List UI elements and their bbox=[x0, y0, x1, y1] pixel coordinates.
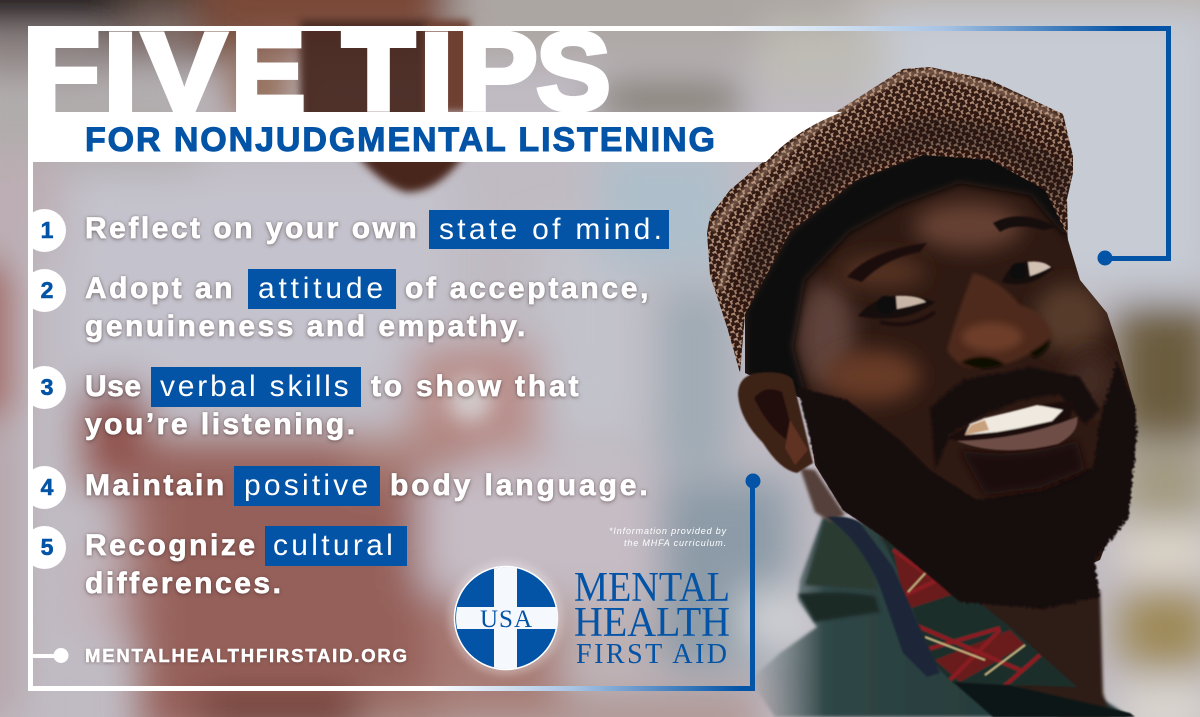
tip 4 bbox=[33, 466, 651, 509]
number badge 2 bbox=[33, 269, 66, 312]
title: FIVE TIPS: P bbox=[458, 11, 538, 133]
tip 5 first line: Recognize bbox=[85, 529, 258, 562]
number badge 3: 3 bbox=[41, 374, 53, 400]
highlight: cultural: cultural bbox=[273, 529, 396, 562]
tip 2 bbox=[33, 269, 651, 346]
frame bottom and right arm with dot bbox=[28, 474, 760, 691]
logo wordmark bbox=[574, 565, 730, 670]
tip 2 first line start: Adopt an bbox=[85, 272, 235, 305]
footnote: the MHFA curriculum. bbox=[624, 538, 727, 548]
logo emblem bbox=[449, 560, 566, 676]
title: FIVE TIPS bbox=[33, 31, 609, 112]
number badge 1: 1 bbox=[41, 217, 53, 243]
tip 2 second line: genuineness and empathy. bbox=[85, 310, 528, 343]
man: face with hair bbox=[745, 155, 1135, 562]
title: FIVE TIPS: V bbox=[142, 11, 226, 134]
number badge 2: 2 bbox=[41, 277, 53, 303]
tip 1 bbox=[33, 209, 669, 252]
tip 2 first line end: of acceptance, bbox=[405, 272, 651, 305]
man: chin shadow bbox=[960, 440, 1085, 495]
frame left side bbox=[28, 26, 33, 691]
man: hat bbox=[700, 60, 1080, 380]
title: FIVE TIPS: F bbox=[28, 11, 100, 134]
title: FIVE TIPS: E bbox=[231, 11, 305, 133]
tip 3 bbox=[33, 366, 581, 444]
highlight: state of mind: state of mind. bbox=[439, 213, 665, 246]
tip 5 second line: differences. bbox=[85, 567, 283, 600]
number badge 5: 5 bbox=[41, 534, 53, 560]
tip 3 first line start: Use bbox=[85, 370, 142, 403]
man: eyes and brows bbox=[847, 216, 1057, 324]
man: moustache and mouth bbox=[930, 367, 1100, 470]
title: FIVE TIPS: I bbox=[104, 10, 137, 133]
number badge 3 bbox=[33, 366, 66, 409]
title: FIVE TIPS: I bbox=[420, 10, 453, 133]
website: MENTALHEALTHFIRSTAID.ORG bbox=[85, 645, 409, 666]
man: plaid collar bbox=[883, 537, 1077, 690]
number badge 4: 4 bbox=[41, 474, 53, 500]
number badge 1 bbox=[33, 209, 66, 252]
logo wordmark: HEALTH bbox=[574, 600, 730, 646]
man: neck bbox=[800, 468, 1110, 717]
title: FIVE TIPS: T bbox=[342, 11, 415, 134]
tip 1 text: Reflect on your own bbox=[85, 212, 419, 245]
tip 3 first line end: to show that bbox=[371, 370, 581, 403]
highlight: verbal skills: verbal skills bbox=[160, 370, 351, 403]
number badge 5 bbox=[33, 526, 66, 569]
man: nose bbox=[947, 273, 1053, 369]
man: jacket lower collar bbox=[953, 682, 1135, 717]
highlight: positive: positive bbox=[244, 469, 371, 502]
highlight: attitude: attitude bbox=[258, 272, 387, 305]
man: beard bbox=[797, 360, 1137, 609]
website link connector bbox=[33, 648, 68, 663]
logo wordmark: MENTAL bbox=[574, 565, 730, 611]
title: FIVE TIPS: S bbox=[536, 11, 611, 133]
man: ear bbox=[738, 372, 813, 473]
number badge 4 bbox=[33, 466, 66, 509]
man: jacket strap bbox=[827, 517, 940, 677]
subtitle: FOR NONJUDGMENTAL LISTENING bbox=[85, 121, 715, 159]
tip 4 end: body language. bbox=[390, 469, 651, 502]
footnote: *Information provided by bbox=[609, 526, 727, 536]
frame top and right arm with dot bbox=[28, 26, 1171, 266]
logo emblem: USA bbox=[480, 606, 532, 633]
logo wordmark: FIRST AID bbox=[576, 639, 727, 670]
tip 5 bbox=[33, 526, 407, 600]
footnote bbox=[609, 526, 727, 548]
subtitle bar bbox=[33, 112, 842, 162]
tip 4 start: Maintain bbox=[85, 469, 227, 502]
man: jacket bbox=[750, 517, 1130, 717]
tip 3 second line: you’re listening. bbox=[85, 408, 358, 441]
